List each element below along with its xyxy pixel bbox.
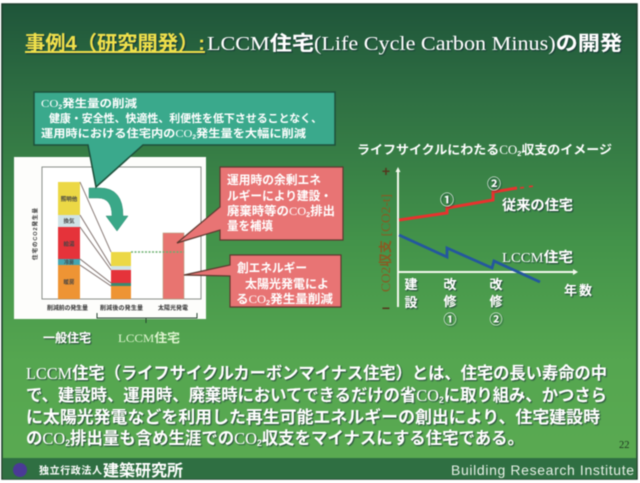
x axis labels [404,277,592,327]
callout: renewable energy: るCO [236,292,265,306]
y axis label: 住宅のCO2発生量 [31,208,39,260]
panel: bar chart of CO2 emissions: 太陽光発電 [158,304,188,312]
line chart: lifecycle CO2 balance: LCCM住宅 [502,249,573,266]
description text: 2 [439,395,444,405]
description text: 2 [257,438,262,448]
callout: renewable energy: 2 [266,300,270,307]
bar: before reduction: 換気 [63,217,75,225]
callout: CO2 reduction [34,92,335,187]
line: LCCM house [399,235,540,282]
x axis labels: ① [443,312,457,327]
x axis labels: 修 [443,294,457,309]
callout: CO2 reduction: 発生量の削減 [62,96,137,110]
arrow: reduction [89,188,128,231]
description text [26,364,607,448]
bar: before reduction: 暖房 [63,278,75,286]
description text: に太陽光発電などを利用した再生可能エネルギーの創出により、住宅建設時 [26,407,600,427]
title [25,32,622,55]
label: LCCM house: LCCM住宅 [118,330,180,345]
callout: surplus energy: 排出 [310,203,335,218]
callout: surplus energy: 量を補填 [227,218,273,233]
bar: before reduction: 給湯 [63,240,75,248]
callout: surplus energy: ルギーにより建設・ [227,188,332,203]
callout: surplus energy: 2 [306,212,310,219]
chart heading: ライフサイクルにわたる CO [357,143,517,157]
panel: bar chart of CO2 emissions [14,157,206,319]
axis plus and minus: + [382,163,390,179]
callout: renewable energy: 発生量削減 [270,291,333,306]
institute name in English: Building Research Institute [451,462,634,478]
x axis labels: 年数 [564,283,592,298]
description text: のCO [26,429,66,448]
description text: に取り組み、かつさら [444,386,607,405]
x axis labels: 改 [489,277,503,292]
bar: before reduction: 照明他 [61,195,78,203]
callout: surplus energy: 運用時の余剰エネ [227,172,321,187]
title: 事例4（研究開発）: [25,32,205,55]
line chart: lifecycle CO2 balance: − [382,300,390,316]
callout: CO2 reduction: 2 [58,105,63,111]
y axis label: CO2収支 [CO2-t] [378,194,393,292]
title: LCCM 住宅(Life Cycle Carbon Minus) の開発 [207,32,622,55]
callout: CO2 reduction: 発生量を大幅に削減 [196,126,306,140]
label: general house: 一般住宅 [43,330,91,345]
callout: renewable energy: 太陽光発電によ [245,276,329,291]
chart heading: 収支のイメージ [521,142,612,157]
footer bar [3,458,636,480]
axes [396,167,578,307]
callout: renewable energy [184,255,341,307]
x axis labels: 削減前の発生量 [47,304,88,312]
page number: 22 [619,440,630,451]
description text: 収支をマイナスにする住宅である。 [262,428,524,448]
line chart: lifecycle CO2 balance [378,163,592,327]
description text: 排出量も含め生涯での [70,429,234,448]
line: conventional house [399,186,534,220]
callout: CO2 reduction: 2 [192,135,197,141]
line chart: lifecycle CO2 balance: ② [487,176,501,192]
icon: institute logo [13,463,27,477]
callout: CO2 reduction: 健康・安全性、快適性、利便性を低下させることなく、 [49,111,322,125]
bar: before reduction: 冷房 [64,259,74,266]
description text: で、建設時、運用時、廃棄時においてできるだけの省CO [26,386,440,405]
callout: CO2 reduction: 運用時における住宅内の CO [41,128,191,140]
institute name: 独立行政法人 [39,464,102,477]
panel: bar chart of CO2 emissions: 削減後の発生量 [100,304,143,312]
chart heading: 2 [517,151,521,158]
x axis labels: 修 [489,294,503,309]
callout: renewable energy: 創エネルギー [237,261,307,275]
callout: CO2 reduction: CO [41,98,58,110]
bracket: LCCM group [97,313,197,323]
x axis labels: 設 [404,295,418,310]
bar: after reduction [111,252,131,299]
bar: solar generation [163,233,184,299]
description text: LCCM住宅（ライフサイクルカーボンマイナス住宅）とは、住宅の長い寿命の中 [26,364,607,383]
x axis labels: 改 [443,277,457,292]
bar: before reduction [58,182,80,299]
description text: CO [234,429,257,448]
line labels: 従来の住宅 [502,197,573,213]
bar connector lines [80,182,111,286]
description text: 2 [65,438,70,448]
x axis labels: ② [489,312,503,327]
x axis labels: 建 [404,277,418,292]
markers: ① [440,192,454,208]
footer bar: 建築研究所 [103,461,183,480]
callout: surplus energy [177,167,343,243]
callout: surplus energy: 廃棄時等のCO [227,204,306,218]
